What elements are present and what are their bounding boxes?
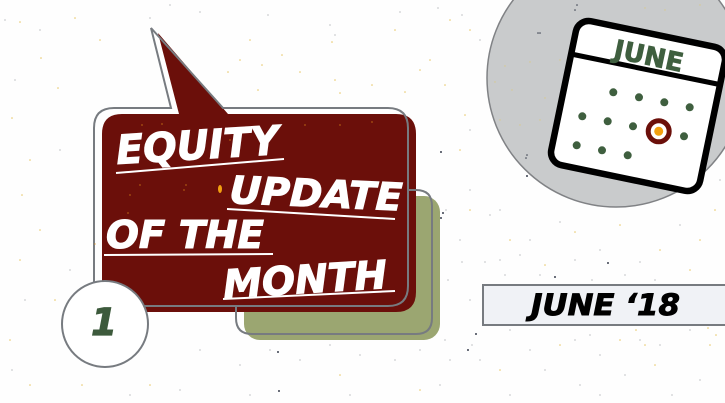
highlighted date marker — [648, 121, 669, 142]
calendar body — [549, 19, 725, 193]
title line: OF THE: OF THE — [106, 213, 264, 257]
yellow paint fleck — [218, 185, 222, 193]
title line: MONTH: MONTH — [222, 253, 388, 308]
number badge — [62, 281, 148, 367]
gray circle — [487, 0, 725, 207]
date label: JUNE ‘18 — [526, 288, 680, 322]
calendar icon — [549, 19, 725, 193]
date label — [483, 285, 725, 325]
calendar date dots — [573, 88, 694, 159]
number badge: 1 — [91, 301, 117, 344]
olive back panel — [244, 196, 440, 340]
title line: UPDATE: UPDATE — [229, 168, 403, 220]
speech bubble — [102, 33, 416, 312]
olive panel outline — [236, 190, 432, 334]
bubble outline — [94, 28, 408, 306]
calendar month label: JUNE — [609, 35, 686, 79]
title line: EQUITY: EQUITY — [115, 118, 284, 174]
calendar header divider — [571, 54, 722, 85]
